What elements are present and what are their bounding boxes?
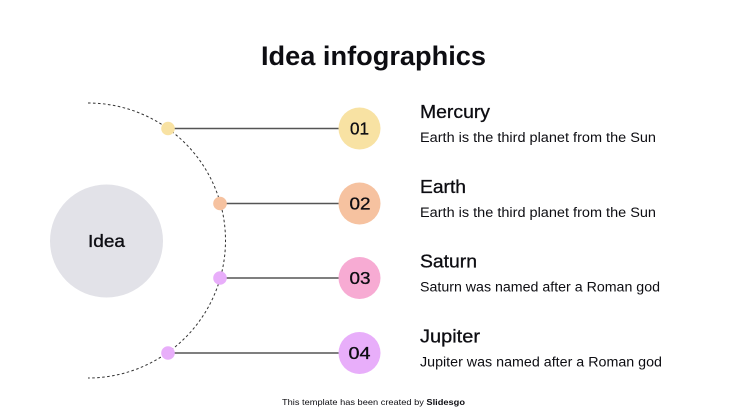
item 01: Mercury: Earth is the third planet from the Sun — [420, 130, 656, 145]
item 04: Jupiter: Jupiter — [420, 326, 480, 346]
item 04: Jupiter: 04 — [348, 343, 371, 363]
item 01: Mercury: 01 — [350, 118, 369, 138]
title: Idea infographics — [261, 41, 486, 71]
footer credit: This template has been created by Slidesgo — [282, 397, 465, 407]
item 01: Mercury: Mercury — [420, 102, 490, 122]
item 02: Earth: 02 — [350, 194, 370, 214]
item 03: Saturn: Saturn — [420, 252, 477, 272]
dashed arc — [88, 103, 226, 378]
item 02: Earth: Earth — [420, 177, 466, 197]
item 03: Saturn: 03 — [350, 268, 370, 288]
item 04: Jupiter — [161, 326, 662, 374]
item 02: Earth: Earth is the third planet from the Sun — [420, 205, 656, 220]
item 04: Jupiter: Jupiter was named after a Roman god — [420, 354, 662, 370]
central idea circle: Idea — [88, 231, 125, 251]
item 01: Mercury — [161, 102, 656, 150]
item 03: Saturn: Saturn was named after a Roman god — [420, 280, 660, 294]
item 03: Saturn — [213, 252, 660, 299]
central idea circle — [50, 184, 163, 298]
item 02: Earth — [213, 177, 656, 224]
